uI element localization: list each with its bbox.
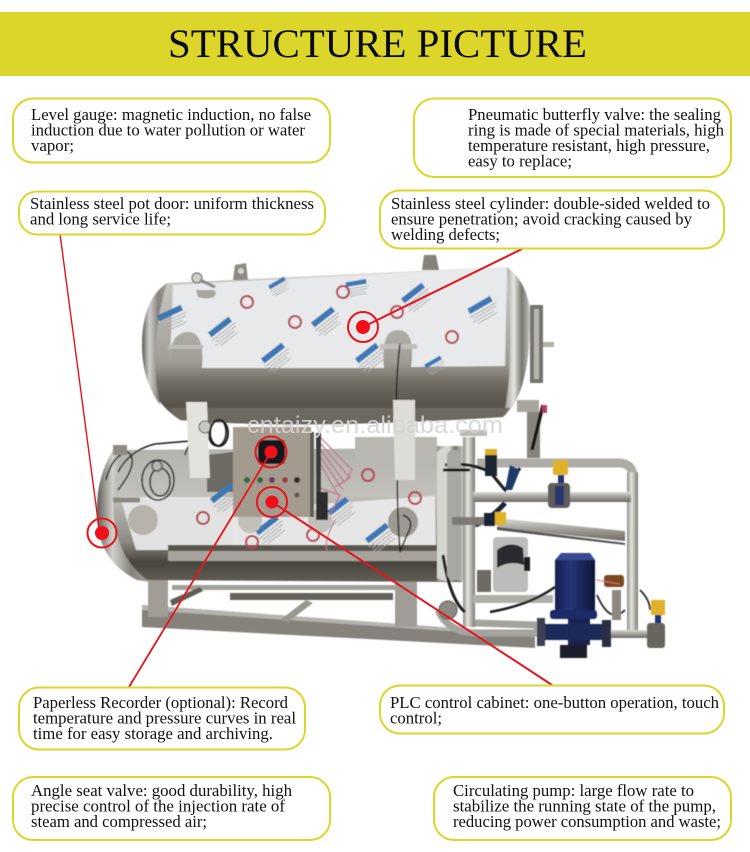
title band [0, 12, 750, 76]
upper tank [142, 267, 530, 552]
callout: butterfly valve: Pneumatic butterfly valve: the sealing [468, 105, 721, 124]
callout: circulating pump: stabilize the running state of the pump, [453, 796, 716, 816]
callout: butterfly valve: temperature resistant, high pressure, [468, 136, 710, 155]
upper tank film [170, 267, 507, 368]
callout: cylinder: Stainless steel cylinder: double-sided welded to [391, 194, 710, 213]
cabinet buttons [244, 477, 300, 498]
callout: circulating pump: reducing power consumption and waste; [453, 812, 721, 831]
callout line: pot door [60, 234, 116, 548]
callout: butterfly valve [414, 98, 731, 177]
control cabinet [233, 427, 314, 517]
callout: butterfly valve: ring is made of special materials, high [468, 120, 725, 140]
lower tank [97, 437, 463, 582]
door hoses [443, 468, 470, 472]
upper tank lugs and fittings [192, 255, 554, 458]
wrapped component [477, 537, 530, 592]
wiring [316, 433, 352, 552]
lower tank shadow [207, 452, 233, 492]
title: STRUCTURE PICTURE [168, 21, 587, 66]
machine illustration [97, 255, 665, 658]
callout: PLC cabinet: PLC control cabinet: one-button operation, touch [390, 693, 720, 712]
callout: circulating pump [434, 777, 731, 840]
callout: PLC cabinet [380, 686, 724, 734]
callout: pot door [19, 192, 325, 234]
callout: paperless recorder: temperature and pressure curves in real [33, 708, 296, 728]
watermark: cntaizy.en.alibaba.com [247, 412, 503, 439]
callout: cylinder: welding defects; [391, 225, 500, 244]
callout: level gauge: vapor; [31, 136, 74, 155]
callout: paperless recorder: Paperless Recorder (optional): Record [33, 693, 289, 712]
callout line: recorder [129, 436, 286, 687]
callout: angle seat valve [13, 777, 330, 840]
support brackets [186, 400, 415, 480]
callout line: cylinder [348, 248, 524, 342]
lower tank door cables [106, 418, 226, 500]
yellow valves [484, 449, 665, 648]
callout: cylinder [380, 190, 724, 248]
callout: paperless recorder: time for easy storage and archiving. [33, 724, 273, 743]
callout: butterfly valve: easy to replace; [468, 152, 572, 170]
base frame [142, 567, 535, 648]
callout: cylinder: ensure penetration; avoid cracking caused by [391, 210, 693, 228]
callout: PLC cabinet: control; [390, 708, 442, 728]
lower tank film [120, 497, 233, 550]
circulating pump [537, 553, 611, 658]
callout: level gauge [13, 98, 330, 162]
lower tank stickers [208, 481, 243, 514]
callout line: PLC cabinet [257, 487, 552, 685]
callout: circulating pump: Circulating pump: large flow rate to [453, 781, 694, 800]
callout: level gauge: Level gauge: magnetic induction, no false [31, 105, 311, 124]
recorder screen [258, 440, 285, 464]
callout: pot door: Stainless steel pot door: uniform thickness [30, 194, 314, 213]
callout: paperless recorder [19, 688, 305, 750]
upper tank stickers [155, 304, 190, 333]
callout: angle seat valve: steam and compressed air; [31, 812, 207, 831]
pipework [438, 430, 650, 638]
callout: angle seat valve: precise control of the injection rate of [31, 796, 286, 816]
callout: pot door: and long service life; [30, 210, 171, 228]
callout: level gauge: induction due to water pollution or water [31, 120, 306, 140]
callout: angle seat valve: Angle seat valve: good durability, high [31, 781, 293, 800]
